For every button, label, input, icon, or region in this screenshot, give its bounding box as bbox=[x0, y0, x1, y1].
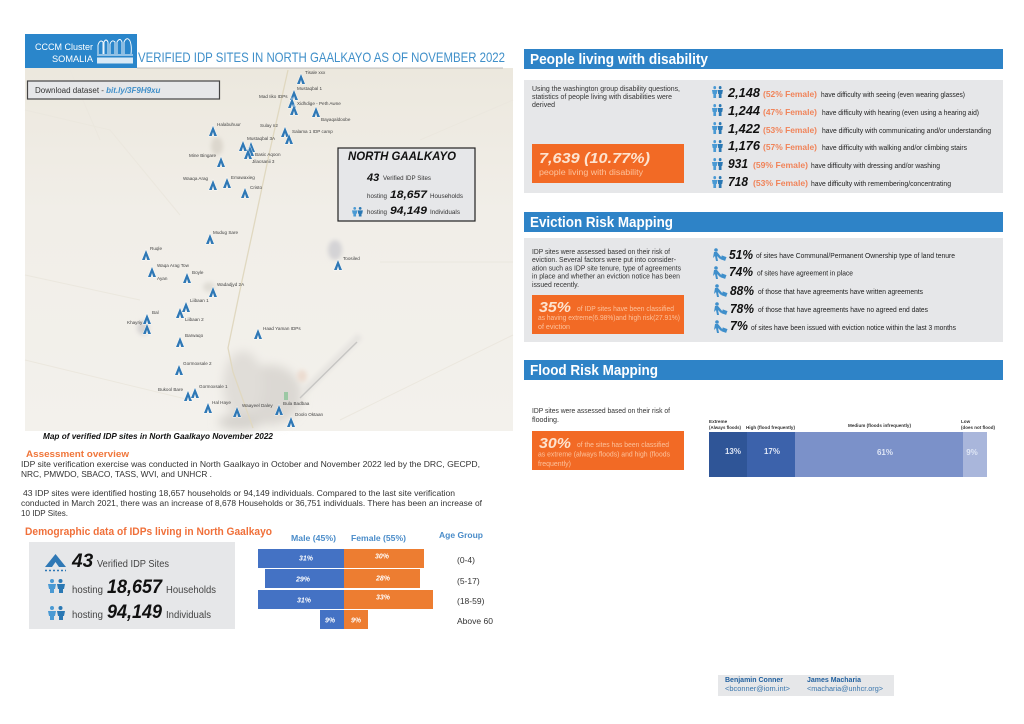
site labels: Bayaqaldoobe bbox=[321, 117, 351, 122]
population pyramid chart bbox=[258, 530, 493, 629]
assessment overview: NRC, PMWDO, SBACO, TASS, WVI, and UNHCR . bbox=[21, 469, 212, 479]
population pyramid chart: 29% bbox=[295, 576, 311, 584]
banner: flood risk mapping: Flood Risk Mapping bbox=[530, 362, 658, 379]
demographic summary panel: Individuals bbox=[166, 610, 211, 621]
disability rows: (53% Female) bbox=[763, 125, 817, 135]
site labels: Salama 1 IDP camp bbox=[292, 129, 333, 134]
population pyramid chart: Female (55%) bbox=[351, 533, 406, 543]
population pyramid chart: 31% bbox=[297, 598, 312, 604]
site markers bbox=[142, 74, 342, 427]
population pyramid chart: 33% bbox=[376, 594, 391, 602]
eviction rows: of those that have agreements have written agreements bbox=[758, 289, 923, 296]
title: VERIFIED IDP SITES IN NORTH GAALKAYO AS OF NOVEMBER 2022 bbox=[138, 49, 505, 65]
eviction rows: of sites have agreement in place bbox=[757, 270, 853, 278]
eviction rows: 51% bbox=[729, 247, 753, 262]
north gaalkayo info box: Households bbox=[430, 194, 463, 200]
assessment overview: IDP site verification exercise was conducted in North Gaalkayo in October and November 2022 led by the DRC, GECPD, bbox=[21, 459, 480, 469]
north gaalkayo info box: NORTH GAALKAYO bbox=[348, 149, 457, 163]
callout: 35%: 35% bbox=[539, 299, 571, 316]
callout: 30%: as extreme (always floods) and high (floods bbox=[538, 452, 670, 458]
flood risk stacked bar chart: 13% bbox=[725, 447, 741, 456]
north gaalkayo info box bbox=[338, 148, 475, 221]
assessment overview: 10 IDP Sites. bbox=[21, 508, 68, 518]
callout: 7,639: people living with disability bbox=[539, 168, 643, 177]
disability rows: have difficulty with dressing and/or washing bbox=[811, 163, 940, 170]
population pyramid chart: Above 60 bbox=[457, 616, 493, 626]
disability rows: 1,244 bbox=[728, 103, 761, 118]
contacts footer bbox=[718, 675, 894, 696]
callout: 35%: as having extreme(6.98%)and high risk(27.91%) bbox=[538, 315, 680, 322]
site labels: Mad Iiko IDPs bbox=[259, 94, 288, 99]
site labels: Wadadjyd 2A bbox=[217, 282, 245, 287]
callout: 35% bbox=[532, 295, 684, 334]
banner: eviction risk mapping bbox=[524, 212, 1003, 232]
north gaalkayo info box: hosting bbox=[367, 194, 387, 200]
disability rows: have difficulty with seeing (even wearing glasses) bbox=[821, 92, 965, 99]
site labels: Gormoxsale 1 bbox=[199, 384, 228, 389]
disability rows: 718 bbox=[728, 174, 749, 189]
flood risk stacked bar chart: (does not flood) bbox=[961, 425, 995, 430]
disability rows: 1,176 bbox=[728, 138, 761, 153]
disability rows: (53% Female) bbox=[753, 178, 808, 188]
disability rows bbox=[712, 85, 991, 189]
site labels bbox=[127, 70, 360, 417]
site labels: Basic Aqoon bbox=[255, 152, 281, 157]
site labels: Barwaqo bbox=[185, 333, 204, 338]
disability rows: 931 bbox=[728, 156, 748, 171]
disability rows: have difficulty with walking and/or climbing stairs bbox=[822, 145, 967, 152]
panel: eviction: ation such as IDP site tenure, type of agreements bbox=[532, 266, 681, 272]
site labels: Liibaan 1 bbox=[190, 298, 209, 303]
eviction rows: 7% bbox=[730, 318, 748, 333]
site labels: Waayeel Daley bbox=[242, 403, 273, 408]
site labels: Toosiled bbox=[343, 256, 360, 261]
north gaalkayo info box: 43 bbox=[366, 172, 379, 184]
site labels: Tisale xxx bbox=[305, 70, 326, 75]
icon: people bbox=[48, 579, 65, 593]
population pyramid chart: 30% bbox=[375, 554, 390, 560]
callout: 35%: of eviction bbox=[538, 324, 570, 331]
population pyramid chart: (18-59) bbox=[457, 596, 485, 606]
panel: eviction: in place and whether an eviction notice has been bbox=[532, 274, 680, 280]
north gaalkayo info box: hosting bbox=[367, 210, 387, 216]
assessment overview: Assessment overview bbox=[26, 449, 130, 460]
logo: CCCM Cluster Somalia bbox=[25, 34, 137, 68]
site labels: Halabuhuur bbox=[217, 122, 241, 127]
site labels: Boyle bbox=[192, 270, 204, 275]
flood description bbox=[532, 408, 670, 424]
panel: eviction bbox=[524, 238, 1003, 342]
demographic summary panel: Households bbox=[166, 585, 216, 596]
download dataset box bbox=[28, 81, 220, 99]
flood risk stacked bar chart: High (flood frequently) bbox=[746, 425, 795, 430]
site labels: Ruqle bbox=[150, 246, 162, 251]
site labels: Sulay n2 bbox=[260, 123, 278, 128]
icon: tent bbox=[45, 554, 66, 570]
demographic summary panel: hosting bbox=[72, 585, 103, 596]
demographic summary panel: 43 bbox=[71, 551, 94, 572]
site labels: Emawaxieg bbox=[231, 175, 255, 180]
flood risk stacked bar chart bbox=[709, 419, 995, 477]
population pyramid chart: 28% bbox=[375, 576, 391, 582]
site labels: Gormoxsale 2 bbox=[183, 361, 212, 366]
disability rows: have difficulty with remembering/concentrating bbox=[811, 181, 951, 188]
site labels: Mustaqbal 1 bbox=[297, 86, 322, 91]
site labels: Bal bbox=[152, 310, 159, 315]
flood risk stacked bar chart: Extreme bbox=[709, 419, 728, 424]
demographic heading: Demographic data of IDPs living in North Gaalkayo bbox=[25, 526, 272, 538]
population pyramid chart: 31% bbox=[299, 556, 314, 562]
disability rows: 2,148 bbox=[727, 85, 761, 100]
north gaalkayo info box: Individuals bbox=[430, 210, 460, 216]
eviction rows: 88% bbox=[730, 283, 754, 298]
demographic summary panel: 94,149 bbox=[107, 602, 162, 623]
north gaalkayo info box: Verified IDP Sites bbox=[383, 176, 431, 182]
demographic summary panel bbox=[29, 542, 235, 629]
eviction rows: of sites have been issued with eviction notice within the last 3 months bbox=[751, 325, 956, 332]
banner: flood risk mapping bbox=[524, 360, 1003, 380]
map of verified IDP sites bbox=[25, 68, 513, 431]
callout: 30% bbox=[532, 431, 684, 470]
callout: 30%: 30% bbox=[539, 435, 571, 452]
site labels: Waqa Arag Tow bbox=[157, 263, 190, 268]
panel: disability: derived bbox=[532, 102, 555, 109]
disability rows: have difficulty with hearing (even using a hearing aid) bbox=[822, 110, 979, 117]
callout: 35%: of IDP sites have been classified bbox=[577, 306, 674, 313]
population pyramid chart: (0-4) bbox=[457, 555, 475, 565]
callout: 7,639 bbox=[532, 144, 684, 183]
contacts footer: Benjamin Conner bbox=[725, 677, 783, 684]
site labels: Jilacsanii 3 bbox=[252, 159, 275, 164]
north gaalkayo info box: 18,657 bbox=[390, 189, 428, 201]
contacts footer: James Macharia bbox=[807, 677, 861, 684]
icon: people bbox=[48, 606, 65, 620]
flood description: flooding. bbox=[532, 417, 559, 424]
disability rows: have difficulty with communicating and/or understanding bbox=[822, 128, 991, 135]
assessment overview: 43 IDP sites were identified hosting 18,657 households or 94,149 individuals. Compared to the last site verification bbox=[23, 488, 455, 498]
population pyramid chart: 9% bbox=[351, 618, 362, 624]
callout: 30%: of the sites has been classified bbox=[577, 442, 669, 449]
eviction rows bbox=[713, 247, 956, 333]
panel: eviction: eviction. Several factors were put into consider- bbox=[532, 257, 677, 264]
banner: people living with disability: People living with disability bbox=[530, 51, 709, 68]
disability rows: (47% Female) bbox=[763, 107, 817, 117]
disability rows: 1,422 bbox=[728, 121, 761, 136]
site labels: Bula Badbaa bbox=[283, 401, 310, 406]
population pyramid chart: 9% bbox=[325, 618, 336, 624]
demographic summary panel: hosting bbox=[72, 610, 103, 621]
demographic summary panel: 18,657 bbox=[107, 577, 163, 598]
panel: eviction: IDP sites were assessed based on their risk of bbox=[532, 249, 670, 256]
icon: people bbox=[352, 207, 363, 217]
population pyramid chart: Age Group bbox=[439, 530, 483, 540]
disability rows: (52% Female) bbox=[763, 89, 817, 99]
flood description: IDP sites were assessed based on their risk of bbox=[532, 408, 670, 415]
flood risk stacked bar chart: (Always floods) bbox=[709, 425, 741, 430]
eviction rows: of those that have agreements have no agreed end dates bbox=[758, 307, 928, 314]
site labels: Mustaqbal 3A bbox=[247, 136, 276, 141]
demographic summary panel: Verified IDP Sites bbox=[97, 559, 169, 570]
site labels: Doolo Oktaan bbox=[295, 412, 324, 417]
north gaalkayo info box: 94,149 bbox=[390, 205, 428, 217]
panel: eviction: issued recently. bbox=[532, 282, 579, 289]
population pyramid chart: Male (45%) bbox=[291, 533, 336, 543]
callout: 30%: frequently) bbox=[538, 461, 571, 468]
contacts footer: <bconner@iom.int> bbox=[725, 686, 790, 693]
assessment overview bbox=[21, 449, 483, 518]
flood risk stacked bar chart: Low bbox=[961, 419, 971, 424]
panel: disability: Using the washington group disability questions, bbox=[532, 86, 680, 93]
flood risk stacked bar chart: 61% bbox=[877, 448, 893, 457]
banner: people living with disability bbox=[524, 49, 1003, 69]
site labels: Mine Bingare bbox=[189, 153, 217, 158]
banner: eviction risk mapping: Eviction Risk Mapping bbox=[530, 214, 673, 231]
site labels: Hal Haye bbox=[212, 400, 231, 405]
site labels: Liibaan 2 bbox=[185, 317, 204, 322]
map caption: Map of verified IDP sites in North Gaalkayo November 2022 bbox=[43, 431, 273, 441]
site labels: Haad Yaman IDPs bbox=[263, 326, 301, 331]
map terrain bbox=[25, 70, 513, 430]
site labels: Mudug Sare bbox=[213, 230, 238, 235]
site labels: Bukool Bare bbox=[158, 387, 183, 392]
site labels: Waaqa Arag bbox=[183, 176, 209, 181]
eviction rows: of sites have Communal/Permanent Ownership type of land tenure bbox=[756, 253, 955, 260]
disability rows: (59% Female) bbox=[753, 160, 808, 170]
eviction rows: 78% bbox=[730, 301, 754, 316]
assessment overview: conducted in March 2021, there was an increase of 8,678 Households or 36,751 individuals. There has been an increase of bbox=[21, 498, 483, 508]
download dataset box: Download dataset - bit.ly/3F9H9xu bbox=[35, 86, 161, 95]
population pyramid chart: (5-17) bbox=[457, 576, 480, 586]
logo: CCCM Cluster Somalia: CCCM Cluster bbox=[35, 42, 93, 53]
flood risk stacked bar chart: 17% bbox=[764, 447, 780, 456]
callout: 7,639: 7,639 (10.77%) bbox=[539, 150, 650, 167]
contacts footer: <macharia@unhcr.org> bbox=[807, 686, 883, 693]
flood risk stacked bar chart: 9% bbox=[966, 448, 978, 457]
site labels: Xidhdige - Peth Awne bbox=[297, 101, 341, 106]
site labels: Cristo bbox=[250, 185, 262, 190]
flood risk stacked bar chart: Medium (floods infrequently) bbox=[848, 423, 911, 428]
disability rows: (57% Female) bbox=[763, 142, 817, 152]
panel: disability: statistics of people living with disabilities were bbox=[532, 94, 672, 101]
logo: CCCM Cluster Somalia: SOMALIA bbox=[52, 54, 94, 65]
panel: disability bbox=[524, 80, 1003, 193]
site labels: Ayan bbox=[157, 276, 168, 281]
eviction rows: 74% bbox=[729, 264, 753, 279]
site labels: Khayriy bbox=[127, 320, 143, 325]
